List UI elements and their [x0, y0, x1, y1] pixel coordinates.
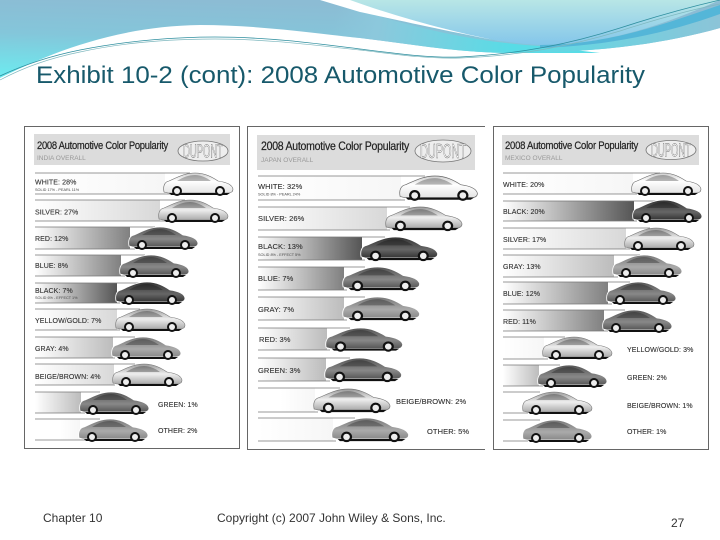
row: gray 13%: GRAY: 13% — [503, 264, 541, 271]
row: other 2% — [35, 419, 197, 442]
row: white 28%: WHITE: 28% — [35, 180, 76, 186]
panel heading: Japan: JAPAN OVERALL — [261, 157, 314, 164]
row: green 2%: GREEN: 2% — [627, 375, 667, 382]
row: red 3% — [258, 328, 403, 352]
row: red 12%: RED: 12% — [35, 236, 68, 243]
row: yellow/gold 3% — [503, 337, 693, 360]
panel: Japan overall — [248, 126, 485, 450]
row: beige/brown 2%: BEIGE/BROWN: 2% — [396, 397, 466, 406]
row: silver 27%: SILVER: 27% — [35, 210, 78, 216]
row: gray 4%: GRAY: 4% — [35, 346, 69, 353]
row: blue 8% — [35, 255, 189, 278]
panel: India overall — [24, 126, 240, 448]
row: silver 17% — [503, 228, 694, 251]
header swoosh — [0, 0, 720, 80]
row: white 32% — [258, 176, 477, 201]
row: black 7% — [35, 282, 185, 305]
panel heading: India — [34, 134, 230, 165]
row: white 20% — [503, 173, 701, 196]
row: red 12% — [35, 227, 198, 250]
panel: Mexico overall — [494, 126, 708, 450]
footer: copyright: Copyright (c) 2007 John Wiley & Sons, Inc. — [217, 511, 446, 525]
row: other 5%: OTHER: 5% — [427, 427, 469, 436]
row: black 7%: SOLID 6% - EFFECT 1% — [35, 296, 78, 300]
row: black 20%: BLACK: 20% — [503, 209, 545, 216]
row: other 1%: OTHER: 1% — [627, 429, 666, 436]
row: yellow/gold 7%: YELLOW/GOLD: 7% — [35, 318, 101, 325]
row: white 28% — [35, 173, 233, 196]
row: yellow/gold 3%: YELLOW/GOLD: 3% — [627, 347, 693, 354]
panel heading: Japan — [257, 135, 475, 170]
panel heading: Mexico: MEXICO OVERALL — [505, 155, 563, 162]
row: black 13% — [258, 237, 438, 261]
row: blue 8%: BLUE: 8% — [35, 263, 68, 270]
row: yellow/gold 7% — [35, 309, 185, 332]
panel heading: India: 2008 Automotive Color Popularity — [37, 140, 169, 152]
row: other 1% — [503, 420, 666, 443]
row: blue 7% — [258, 267, 420, 291]
row: beige/brown 1%: BEIGE/BROWN: 1% — [627, 403, 693, 410]
row: blue 7%: BLUE: 7% — [258, 274, 294, 283]
row: other 5% — [258, 418, 469, 442]
footer: chapter: Chapter 10 — [43, 511, 103, 525]
row: gray 7%: GRAY: 7% — [258, 305, 294, 314]
row: black 13%: BLACK: 13% — [258, 242, 303, 251]
row: black 13%: SOLID 8% - EFFECT 5% — [258, 253, 301, 257]
row: blue 12% — [503, 282, 676, 305]
panel heading: Mexico: 2008 Automotive Color Popularity — [505, 140, 639, 152]
row: green 2% — [503, 365, 667, 388]
row: beige/brown 1% — [503, 392, 693, 415]
row: white 32%: SOLID 8% - PEARL 24% — [258, 192, 301, 196]
panel heading: Mexico — [502, 135, 699, 165]
row: beige/brown 4%: BEIGE/BROWN: 4% — [35, 374, 101, 381]
row: white 20%: WHITE: 20% — [503, 182, 544, 189]
row: beige/brown 4% — [35, 364, 182, 387]
row: silver 26% — [258, 207, 462, 231]
row: silver 26%: SILVER: 26% — [258, 214, 305, 223]
row: red 3%: RED: 3% — [259, 335, 291, 344]
row: white 28%: SOLID 17% - PEARL 11% — [35, 188, 80, 192]
title: Exhibit 10-2 (cont): 2008 Automotive Color Popularity — [36, 62, 645, 89]
row: green 3%: GREEN: 3% — [258, 366, 301, 375]
row: silver 27% — [35, 200, 228, 223]
panel heading: Japan: 2008 Automotive Color Popularity — [261, 139, 409, 153]
row: green 3% — [258, 358, 402, 382]
row: red 11%: RED: 11% — [503, 319, 536, 326]
row: other 2%: OTHER: 2% — [158, 428, 197, 435]
panel heading: Japan: DUPONT — [420, 141, 466, 163]
row: green 1% — [35, 392, 198, 415]
row: silver 17%: SILVER: 17% — [503, 237, 546, 244]
row: black 7%: BLACK: 7% — [35, 288, 73, 295]
footer: page number: 27 — [671, 516, 685, 530]
row: gray 7% — [258, 297, 420, 321]
panel heading: India: INDIA OVERALL — [37, 155, 86, 162]
row: black 20% — [503, 200, 702, 223]
row: white 32%: WHITE: 32% — [258, 182, 303, 191]
row: gray 4% — [35, 337, 181, 360]
row: red 11% — [503, 310, 672, 333]
panel heading: India: DUPONT — [183, 142, 223, 162]
row: gray 13% — [503, 255, 682, 278]
row: green 1%: GREEN: 1% — [158, 402, 198, 409]
row: beige/brown 2% — [258, 388, 466, 413]
row: blue 12%: BLUE: 12% — [503, 291, 540, 298]
